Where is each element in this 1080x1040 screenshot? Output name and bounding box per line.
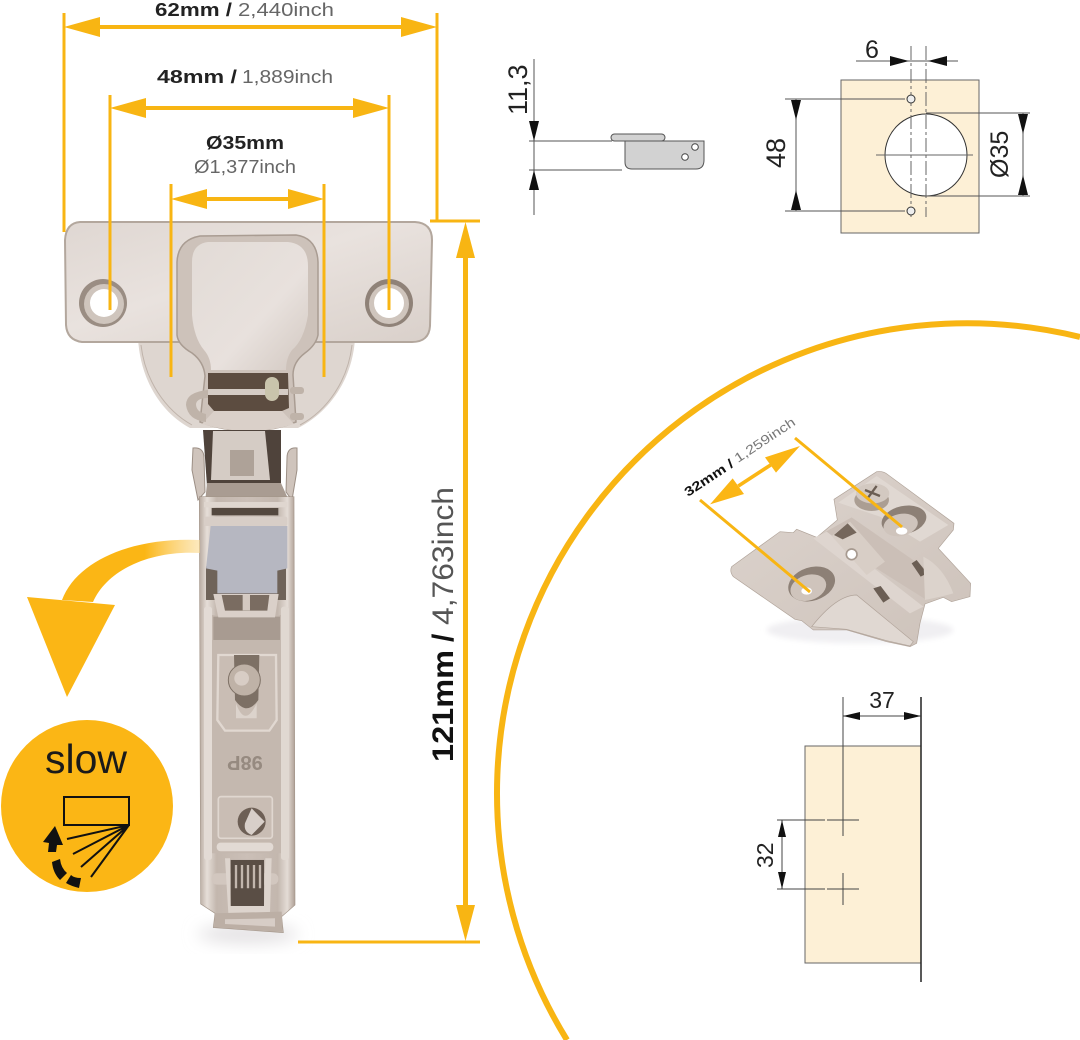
label metric: 62mm / (155, 0, 232, 20)
curved arrow down (27, 540, 200, 697)
label: 121mm (427, 650, 460, 762)
drawing: cup bore panel (761, 36, 1030, 233)
central window (832, 522, 885, 575)
stamped code: 98P (227, 751, 263, 773)
hinge arm (199, 497, 295, 933)
bracket under block (213, 594, 279, 617)
dimension: overall width 62mm (64, 0, 437, 232)
arm lower crossbar (204, 517, 287, 526)
dimension: cup diameter 35mm (171, 133, 324, 377)
rivets (692, 144, 698, 150)
extension lines (64, 13, 437, 232)
label inch: Ø1,377inch (194, 157, 296, 177)
extension lines (298, 221, 480, 942)
label (427, 487, 460, 762)
dimension 48: 48 (761, 138, 791, 168)
phillips screw (854, 483, 889, 511)
dimension lines (529, 59, 622, 215)
badge: slow closing (1, 720, 173, 892)
arm frame (199, 497, 295, 933)
knuckle right (286, 448, 297, 500)
front slot (784, 561, 840, 607)
cross marks (827, 697, 859, 905)
drawing: side profile 11,3 (503, 59, 704, 215)
dimension 37 (843, 687, 921, 720)
cover window (202, 373, 294, 431)
label metric: 48mm / (157, 67, 237, 87)
dimension diameter 35: Ø35 (986, 131, 1014, 178)
hinge cup (138, 338, 355, 428)
edge line (920, 697, 922, 982)
grey damper block (206, 526, 287, 593)
label inch: 1,259inch (731, 414, 798, 465)
dimension 32: 32 (752, 842, 778, 868)
dimension 6: 6 (865, 36, 879, 64)
label: 4,763inch (427, 487, 460, 625)
dimension 48 (761, 99, 905, 211)
double arrow (110, 98, 389, 118)
label metric: 32mm / (681, 456, 737, 499)
extension lines (700, 438, 902, 592)
spring assembly (212, 858, 278, 915)
icon: door closing (43, 797, 129, 888)
drawing: mounting plate panel (752, 687, 921, 982)
right screw hole (365, 279, 413, 327)
cover top panel (192, 242, 308, 370)
arm dark gap (212, 508, 278, 515)
bottom tab (214, 912, 283, 932)
cover side pins (186, 387, 304, 422)
dimension arrows (529, 121, 539, 190)
arm crossbars (204, 502, 287, 507)
small slots (873, 560, 927, 603)
double arrow (64, 17, 437, 37)
plate shadow (767, 617, 953, 643)
right foot curve (923, 557, 953, 600)
rail right (281, 607, 289, 860)
pilot holes (907, 95, 915, 103)
lower flange (812, 595, 913, 646)
cap profile (611, 134, 665, 141)
large yellow arc (497, 323, 1080, 1040)
double arrow (710, 446, 800, 504)
knuckle left (192, 448, 205, 500)
rail left (204, 607, 212, 860)
hinge photo (65, 222, 432, 943)
channel behind block (206, 567, 286, 600)
dimension: screw spacing 48mm (110, 67, 389, 310)
left screw hole (79, 279, 127, 327)
cup profile (625, 141, 704, 169)
link lower plate (205, 483, 290, 503)
cup rim line (141, 345, 352, 425)
inner recess (211, 615, 283, 853)
badge word: slow (45, 736, 127, 782)
double arrow (171, 189, 324, 209)
badge circle (1, 720, 173, 892)
bore (885, 114, 967, 196)
plate body (731, 471, 971, 647)
value: 11,3 (503, 64, 533, 115)
central channel (822, 517, 947, 600)
mounting wing plate (65, 222, 432, 342)
dimension diameter 35 (926, 113, 1030, 196)
upper recess shadow (213, 617, 280, 640)
lower screw plate (217, 797, 273, 851)
adjusting slot plate (217, 655, 277, 731)
rear slot (879, 502, 929, 539)
double arrow (456, 222, 475, 941)
link backing (203, 430, 281, 486)
dimension: plate 32mm (681, 414, 902, 592)
dimension: height 121mm (298, 221, 480, 942)
panel (805, 746, 921, 963)
dimension 6 (856, 36, 958, 66)
label: / (427, 633, 460, 642)
extension lines (110, 95, 389, 310)
label inch: 1,889inch (242, 67, 333, 87)
centre hole (846, 549, 857, 560)
mounting plate photo (731, 471, 971, 647)
label inch: 2,440inch (238, 0, 334, 20)
cup cover (177, 235, 318, 431)
panel (841, 80, 979, 233)
dimension 37: 37 (869, 687, 895, 713)
extension lines (171, 184, 324, 377)
hinge shadow (198, 925, 298, 943)
link centre (211, 431, 270, 480)
centre lines (911, 46, 926, 217)
label metric: Ø35mm (206, 133, 284, 153)
hinge link (192, 430, 297, 503)
ridge highlight (813, 532, 923, 613)
rear plate highlight (838, 476, 948, 542)
dimension 32 (752, 820, 825, 889)
